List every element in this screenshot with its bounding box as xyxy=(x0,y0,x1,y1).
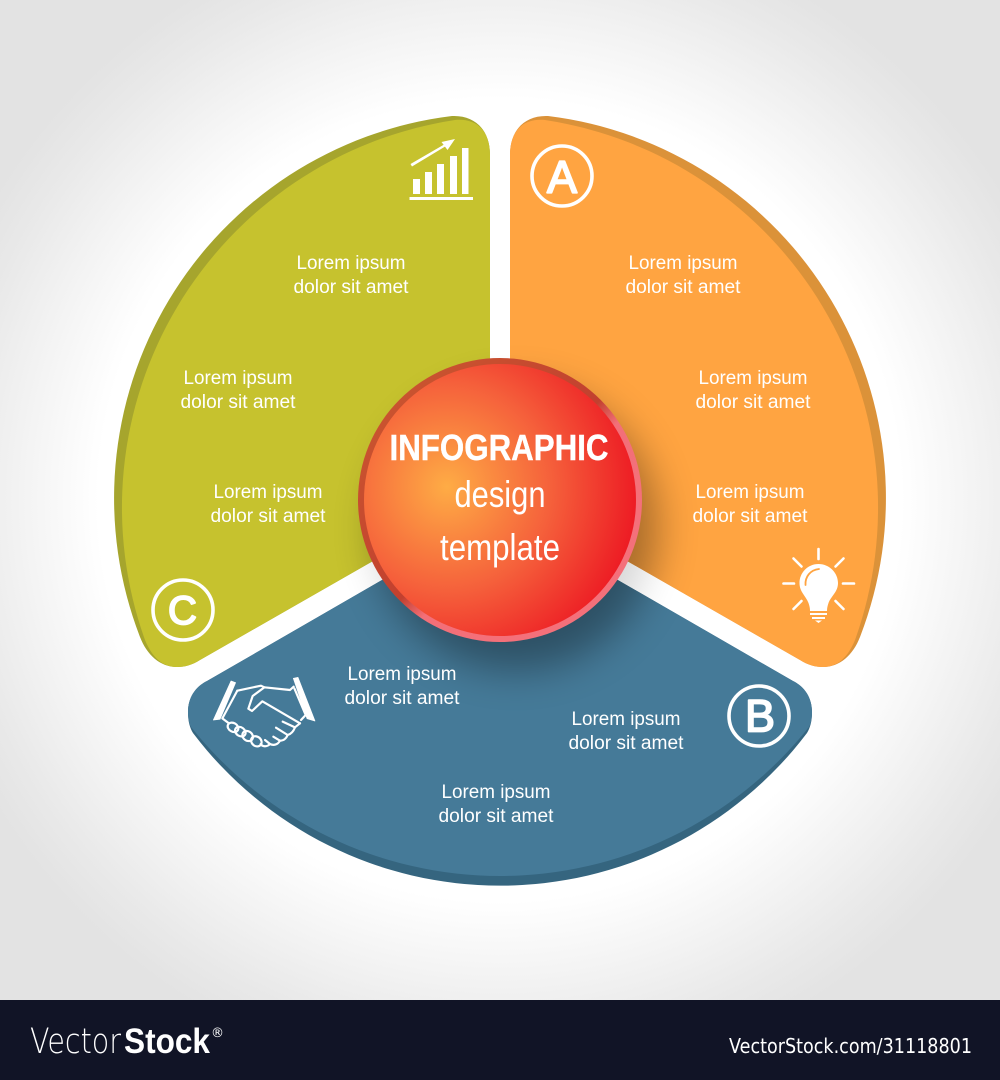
icon: letter B badge: B xyxy=(745,690,775,742)
footer logo: VectorStock: Stock xyxy=(124,1022,210,1061)
panel: B blue segment xyxy=(188,512,812,886)
icon: letter A badge xyxy=(532,146,592,206)
icon: handshake xyxy=(213,677,315,749)
footer logo: VectorStock: ® xyxy=(211,1026,224,1041)
text block: B1: Lorem ipsum xyxy=(348,664,456,685)
text block: B3: dolor sit amet xyxy=(438,806,554,827)
text block: A3: dolor sit amet xyxy=(692,506,808,527)
icon: light bulb xyxy=(784,549,854,623)
text block: C2: Lorem ipsum xyxy=(184,368,292,389)
footer logo: VectorStock xyxy=(30,1022,224,1062)
text block: B3 xyxy=(438,782,554,827)
text block: A2: dolor sit amet xyxy=(696,392,811,413)
center circle xyxy=(358,358,642,642)
title: design xyxy=(454,474,546,515)
text block: C1: dolor sit amet xyxy=(294,277,409,298)
icon: letter C badge: C xyxy=(168,589,197,633)
panel: A orange segment xyxy=(510,116,886,667)
title xyxy=(390,427,609,568)
text block: C2 xyxy=(180,368,296,413)
text block: B3: Lorem ipsum xyxy=(442,782,550,803)
text block: A2: Lorem ipsum xyxy=(698,368,808,389)
text block: C1 xyxy=(294,253,409,298)
text block: A3 xyxy=(692,482,808,527)
text block: B2: dolor sit amet xyxy=(568,733,684,754)
title: INFOGRAPHIC xyxy=(390,427,609,468)
panel: C green segment xyxy=(114,116,490,667)
text block: C2: dolor sit amet xyxy=(180,392,296,413)
icon: letter C badge xyxy=(153,580,213,640)
text block: C1: Lorem ipsum xyxy=(296,253,406,274)
text block: A3: Lorem ipsum xyxy=(696,482,804,503)
footer bar xyxy=(0,1000,1000,1080)
footer logo: VectorStock: Vector xyxy=(30,1022,121,1062)
text block: B1: dolor sit amet xyxy=(344,688,460,709)
icon: letter B badge xyxy=(729,686,789,746)
text block: C3: Lorem ipsum xyxy=(214,482,322,503)
icon: letter A badge: A xyxy=(547,152,577,202)
text block: A1 xyxy=(626,253,741,298)
text block: C3 xyxy=(210,482,326,527)
text block: A2 xyxy=(696,368,811,413)
icon: bar chart with arrow xyxy=(410,139,473,200)
title: template xyxy=(440,527,560,568)
text block: B1 xyxy=(344,664,460,709)
text block: A1: Lorem ipsum xyxy=(628,253,738,274)
text block: C3: dolor sit amet xyxy=(210,506,326,527)
footer image id: VectorStock.com/31118801 xyxy=(729,1034,972,1058)
text block: A1: dolor sit amet xyxy=(626,277,741,298)
ball shadow on background gaps xyxy=(372,385,652,665)
text block: B2: Lorem ipsum xyxy=(572,709,680,730)
text block: B2 xyxy=(568,709,684,754)
ball shadow on panels xyxy=(374,386,658,670)
